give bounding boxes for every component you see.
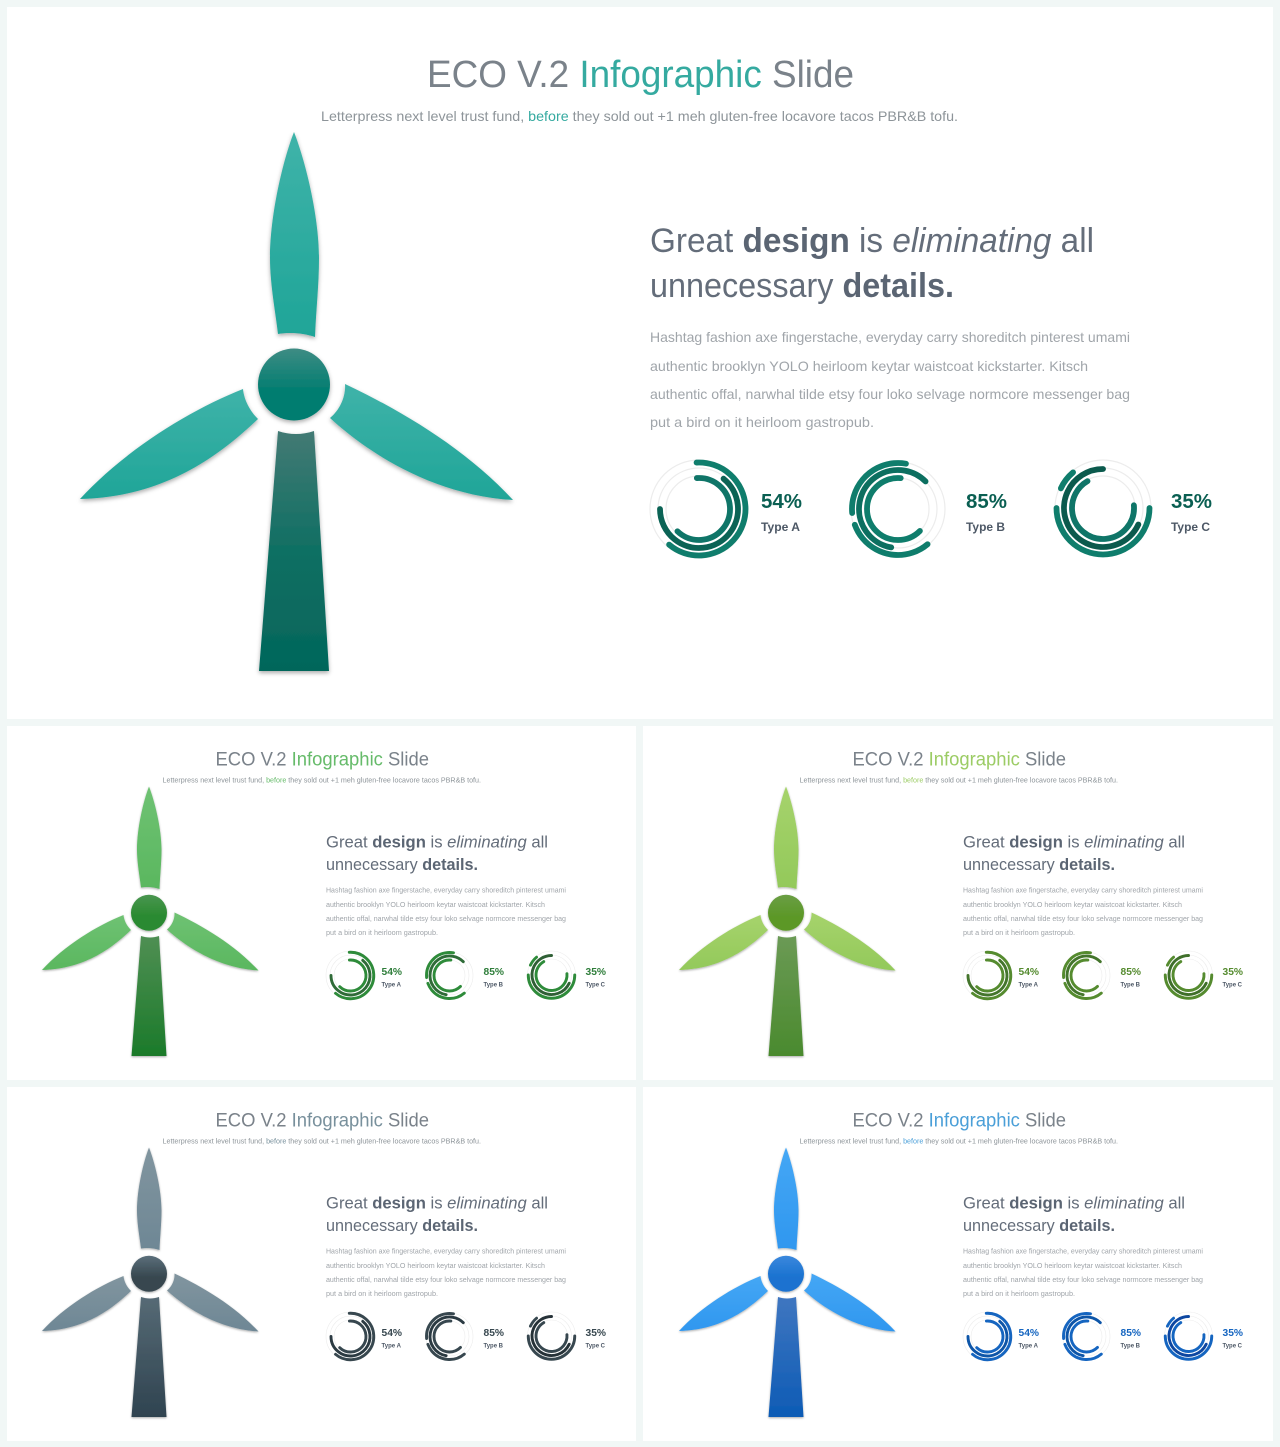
heading: Great design is eliminating all xyxy=(963,832,1185,852)
body text xyxy=(650,329,1130,430)
donut chart: Type A 54%: 54% xyxy=(1018,1328,1039,1339)
body text: authentic brooklyn YOLO heirloom keytar waistcoat kickstarter. Kitsch xyxy=(963,902,1182,909)
heading: Great design is eliminating all xyxy=(650,222,1094,260)
body text: authentic offal, narwhal tilde etsy four loko selvage normcore messenger bag xyxy=(326,1277,566,1284)
heading xyxy=(963,1194,1185,1235)
donut chart: Type B 85% xyxy=(417,943,504,1008)
donut chart: Type C 35% xyxy=(1041,446,1212,570)
donut chart: Type C 35% xyxy=(1158,944,1243,1006)
donut chart: Type C 35%: 35% xyxy=(586,967,606,978)
body text: Hashtag fashion axe fingerstache, everyday carry shoreditch pinterest umami xyxy=(963,888,1203,894)
donut chart: Type A 54%: Type A xyxy=(382,1344,402,1350)
donut chart: Type A 54% xyxy=(644,454,802,564)
subtitle: Letterpress next level trust fund, before they sold out +1 meh gluten-free locavore tacos PBR&B tofu. xyxy=(162,1138,481,1146)
donut chart: Type B 85%: Type B xyxy=(1120,1344,1141,1350)
donut chart: Type C 35%: Type C xyxy=(1222,982,1243,988)
panel: light green slide xyxy=(643,726,1273,1080)
panel: blue slide xyxy=(643,1087,1273,1441)
body text: authentic brooklyn YOLO heirloom keytar waistcoat kickstarter. Kitsch xyxy=(963,1263,1182,1270)
donut chart: Type A 54%: 54% xyxy=(761,491,802,513)
donut chart: Type A 54%: 54% xyxy=(382,967,402,978)
body text: put a bird on it heirloom gastropub. xyxy=(326,930,438,937)
icon: wind turbine xyxy=(42,786,258,1056)
body text: authentic offal, narwhal tilde etsy four loko selvage normcore messenger bag xyxy=(963,916,1203,923)
donut chart: Type B 85% xyxy=(833,444,1007,574)
donut chart: Type C 35%: Type C xyxy=(586,1344,606,1350)
heading: unnecessary details. xyxy=(326,855,478,874)
title: ECO V.2 Infographic Slide xyxy=(216,1110,429,1132)
donut chart: Type B 85%: 85% xyxy=(484,1328,504,1339)
donut chart: Type A 54%: 54% xyxy=(382,1328,402,1339)
subtitle: Letterpress next level trust fund, before they sold out +1 meh gluten-free locavore tacos PBR&B tofu. xyxy=(321,108,958,124)
donut chart: Type C 35%: Type C xyxy=(1171,520,1210,534)
body text: Hashtag fashion axe fingerstache, everyday carry shoreditch pinterest umami xyxy=(650,329,1130,345)
panel: green slide xyxy=(7,726,636,1080)
donut chart: Type A 54% xyxy=(960,948,1039,1003)
subtitle: Letterpress next level trust fund, before they sold out +1 meh gluten-free locavore tacos PBR&B tofu. xyxy=(800,1138,1118,1146)
donut chart: Type B 85%: 85% xyxy=(484,967,504,978)
body text: authentic brooklyn YOLO heirloom keytar waistcoat kickstarter. Kitsch xyxy=(326,1263,545,1270)
donut chart: Type B 85%: Type B xyxy=(484,1344,504,1350)
heading xyxy=(650,222,1094,305)
icon: wind turbine xyxy=(679,1148,896,1417)
heading xyxy=(326,832,548,874)
donut chart: Type A 54% xyxy=(960,1309,1039,1364)
panel: main teal slide xyxy=(7,7,1273,719)
donut chart: Type B 85%: 85% xyxy=(1120,1328,1141,1339)
donut chart: Type C 35%: 35% xyxy=(1222,967,1243,978)
title: ECO V.2 Infographic Slide xyxy=(852,750,1066,770)
subtitle: Letterpress next level trust fund, before they sold out +1 meh gluten-free locavore tacos PBR&B tofu. xyxy=(800,778,1118,784)
donut chart: Type A 54%: 54% xyxy=(1018,967,1039,978)
body text: put a bird on it heirloom gastropub. xyxy=(650,414,874,430)
heading: unnecessary details. xyxy=(963,855,1115,874)
donut chart: Type B 85%: Type B xyxy=(484,982,504,988)
heading: Great design is eliminating all xyxy=(963,1194,1185,1212)
body text: Hashtag fashion axe fingerstache, everyday carry shoreditch pinterest umami xyxy=(963,1248,1203,1256)
body text xyxy=(963,888,1203,937)
heading: Great design is eliminating all xyxy=(326,832,548,852)
donut chart: Type C 35%: 35% xyxy=(1171,491,1212,513)
donut chart: Type A 54%: Type A xyxy=(1018,982,1039,988)
donut chart: Type A 54% xyxy=(323,1309,402,1364)
donut chart: Type A 54%: Type A xyxy=(761,520,800,534)
heading: Great design is eliminating all xyxy=(326,1194,548,1212)
donut chart: Type B 85% xyxy=(1054,1304,1141,1369)
donut chart: Type C 35% xyxy=(521,1305,606,1367)
icon: wind turbine xyxy=(679,786,896,1056)
donut chart: Type B 85%: Type B xyxy=(966,520,1005,534)
body text: authentic offal, narwhal tilde etsy four loko selvage normcore messenger bag xyxy=(326,916,566,923)
title: ECO V.2 Infographic Slide xyxy=(427,54,854,96)
icon: wind turbine xyxy=(42,1148,258,1417)
body text: authentic offal, narwhal tilde etsy four loko selvage normcore messenger bag xyxy=(650,386,1130,402)
title: ECO V.2 Infographic Slide xyxy=(216,750,429,770)
body text: put a bird on it heirloom gastropub. xyxy=(963,930,1075,937)
body text: put a bird on it heirloom gastropub. xyxy=(963,1291,1075,1298)
donut chart: Type A 54%: Type A xyxy=(382,982,402,988)
heading xyxy=(326,1194,548,1235)
donut chart: Type C 35%: 35% xyxy=(1222,1328,1243,1339)
body text: put a bird on it heirloom gastropub. xyxy=(326,1291,438,1298)
body text: authentic brooklyn YOLO heirloom keytar waistcoat kickstarter. Kitsch xyxy=(650,358,1088,374)
body text xyxy=(326,1248,566,1298)
donut chart: Type B 85%: 85% xyxy=(1120,967,1141,978)
body text xyxy=(963,1248,1203,1298)
heading xyxy=(963,832,1185,874)
donut chart: Type B 85% xyxy=(417,1304,504,1369)
body text: authentic brooklyn YOLO heirloom keytar waistcoat kickstarter. Kitsch xyxy=(326,902,545,909)
donut chart: Type A 54%: Type A xyxy=(1018,1344,1039,1350)
body text: authentic offal, narwhal tilde etsy four loko selvage normcore messenger bag xyxy=(963,1277,1203,1284)
heading: unnecessary details. xyxy=(650,267,954,305)
donut chart: Type C 35%: 35% xyxy=(586,1328,606,1339)
title: ECO V.2 Infographic Slide xyxy=(852,1110,1066,1132)
donut chart: Type A 54% xyxy=(323,948,402,1003)
heading: unnecessary details. xyxy=(326,1216,478,1235)
heading: unnecessary details. xyxy=(963,1216,1115,1235)
donut chart: Type C 35%: Type C xyxy=(586,982,606,988)
donut chart: Type B 85% xyxy=(1054,943,1141,1008)
donut chart: Type C 35% xyxy=(521,944,606,1006)
donut chart: Type C 35%: Type C xyxy=(1222,1344,1243,1350)
body text: Hashtag fashion axe fingerstache, everyday carry shoreditch pinterest umami xyxy=(326,1248,566,1256)
panel: slate slide xyxy=(7,1087,636,1441)
donut chart: Type C 35% xyxy=(1158,1305,1243,1367)
body text xyxy=(326,888,566,937)
icon: wind turbine xyxy=(80,132,513,671)
subtitle: Letterpress next level trust fund, before they sold out +1 meh gluten-free locavore tacos PBR&B tofu. xyxy=(162,778,481,784)
body text: Hashtag fashion axe fingerstache, everyday carry shoreditch pinterest umami xyxy=(326,888,566,894)
donut chart: Type B 85%: 85% xyxy=(966,491,1007,513)
donut chart: Type B 85%: Type B xyxy=(1120,982,1141,988)
